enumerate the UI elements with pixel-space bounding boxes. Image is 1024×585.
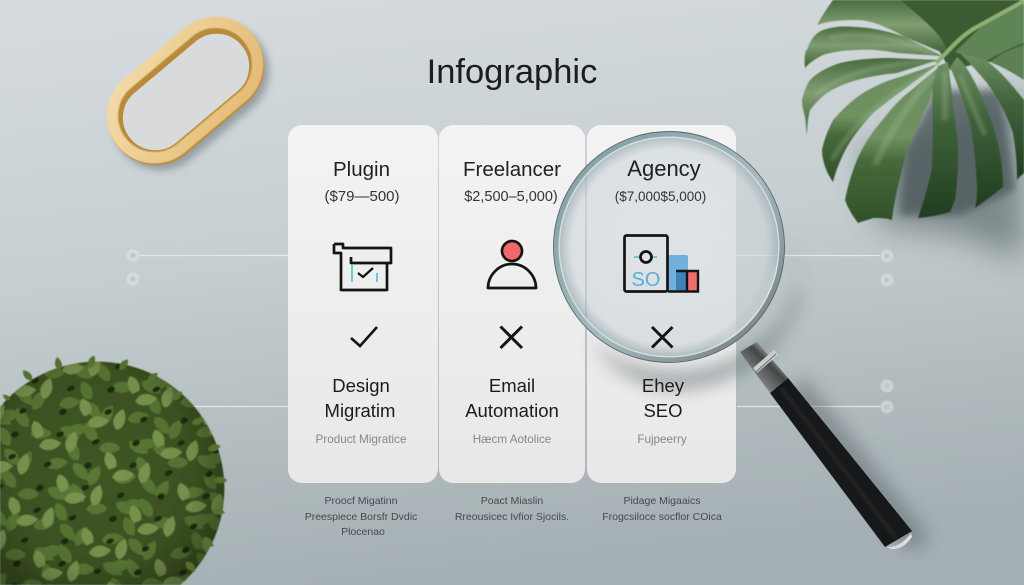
caption: plugin: Plocenao [341, 526, 385, 538]
monstera leaf [802, 0, 1024, 223]
note: agency: Fujpeerry [637, 433, 687, 446]
leaflet 3 [802, 58, 938, 135]
feature: freelancer: Email [489, 375, 535, 396]
shadow: cast by leaf [860, 90, 1024, 260]
icon: cross [500, 326, 522, 348]
feature: plugin: Migratim [325, 400, 395, 421]
caption: agency: Pidage Migaaics [623, 495, 701, 507]
icon: cross [652, 327, 672, 348]
heading: freelancer: Freelancer [463, 158, 561, 181]
top leaf cluster [900, 0, 1024, 70]
price: agency: ($7,000$5,000) [615, 189, 706, 204]
price: plugin: ($79—500) [324, 188, 400, 205]
lens highlights [715, 162, 778, 346]
leaflet 6 [918, 62, 958, 218]
leaf highlights [815, 35, 985, 165]
bush edge leaves [2, 354, 227, 574]
stem [936, 1, 1024, 63]
icon: SEO document and bars [624, 236, 698, 292]
note: plugin: Product Migratice [316, 433, 406, 446]
leaflet 7 [950, 57, 1003, 208]
handle [740, 342, 912, 549]
panel: agency content [615, 156, 706, 446]
upper right leaflet [955, 1, 1024, 62]
feature: agency: SEO [643, 400, 683, 421]
boxwood bush [0, 354, 227, 585]
leaflet 5 [845, 68, 938, 223]
title: Infographic [427, 53, 597, 91]
icon: box with check [334, 244, 391, 290]
feature: agency: Ehey [642, 375, 685, 396]
leaflet 1 [817, 0, 948, 55]
magnifier lens glass [556, 134, 782, 360]
heading: plugin: Plugin [333, 158, 390, 181]
feature: freelancer: Automation [465, 400, 559, 421]
panel: plugin [288, 125, 438, 483]
caption: plugin: Preespiece Borsfr Dvdic [305, 511, 417, 523]
caption: freelancer: Poact Miaslin [481, 495, 543, 507]
icon: person [488, 241, 536, 288]
icon: SEO document and bars: SO [632, 269, 660, 291]
connector lines and dots [126, 249, 894, 414]
icon: check mark [351, 327, 377, 346]
handle shadow [795, 385, 920, 545]
lens rim [556, 134, 782, 360]
note: freelancer: Hæcm Aotolice [473, 433, 551, 446]
leaflet 2 [805, 26, 942, 68]
panel: agency card [587, 125, 736, 483]
caption: plugin: Proocf Migatinn [325, 495, 398, 507]
feature: plugin: Design [332, 375, 390, 396]
leaflet 8 [960, 53, 1024, 180]
leaflet 4 [822, 64, 938, 182]
magnifier lens shadow [590, 240, 800, 388]
panel: freelancer [439, 125, 585, 483]
caption: agency: Frogcsiloce socflor COica [602, 511, 722, 523]
magnifying glass frame [554, 125, 920, 549]
gold ring ornament [95, 5, 278, 179]
caption: freelancer: Rreousicec Ivfior Sjocils. [455, 511, 569, 523]
price: freelancer: $2,500–5,000) [464, 189, 558, 205]
shadow between leaflets [900, 90, 1015, 215]
heading: agency: Agency [627, 156, 701, 181]
